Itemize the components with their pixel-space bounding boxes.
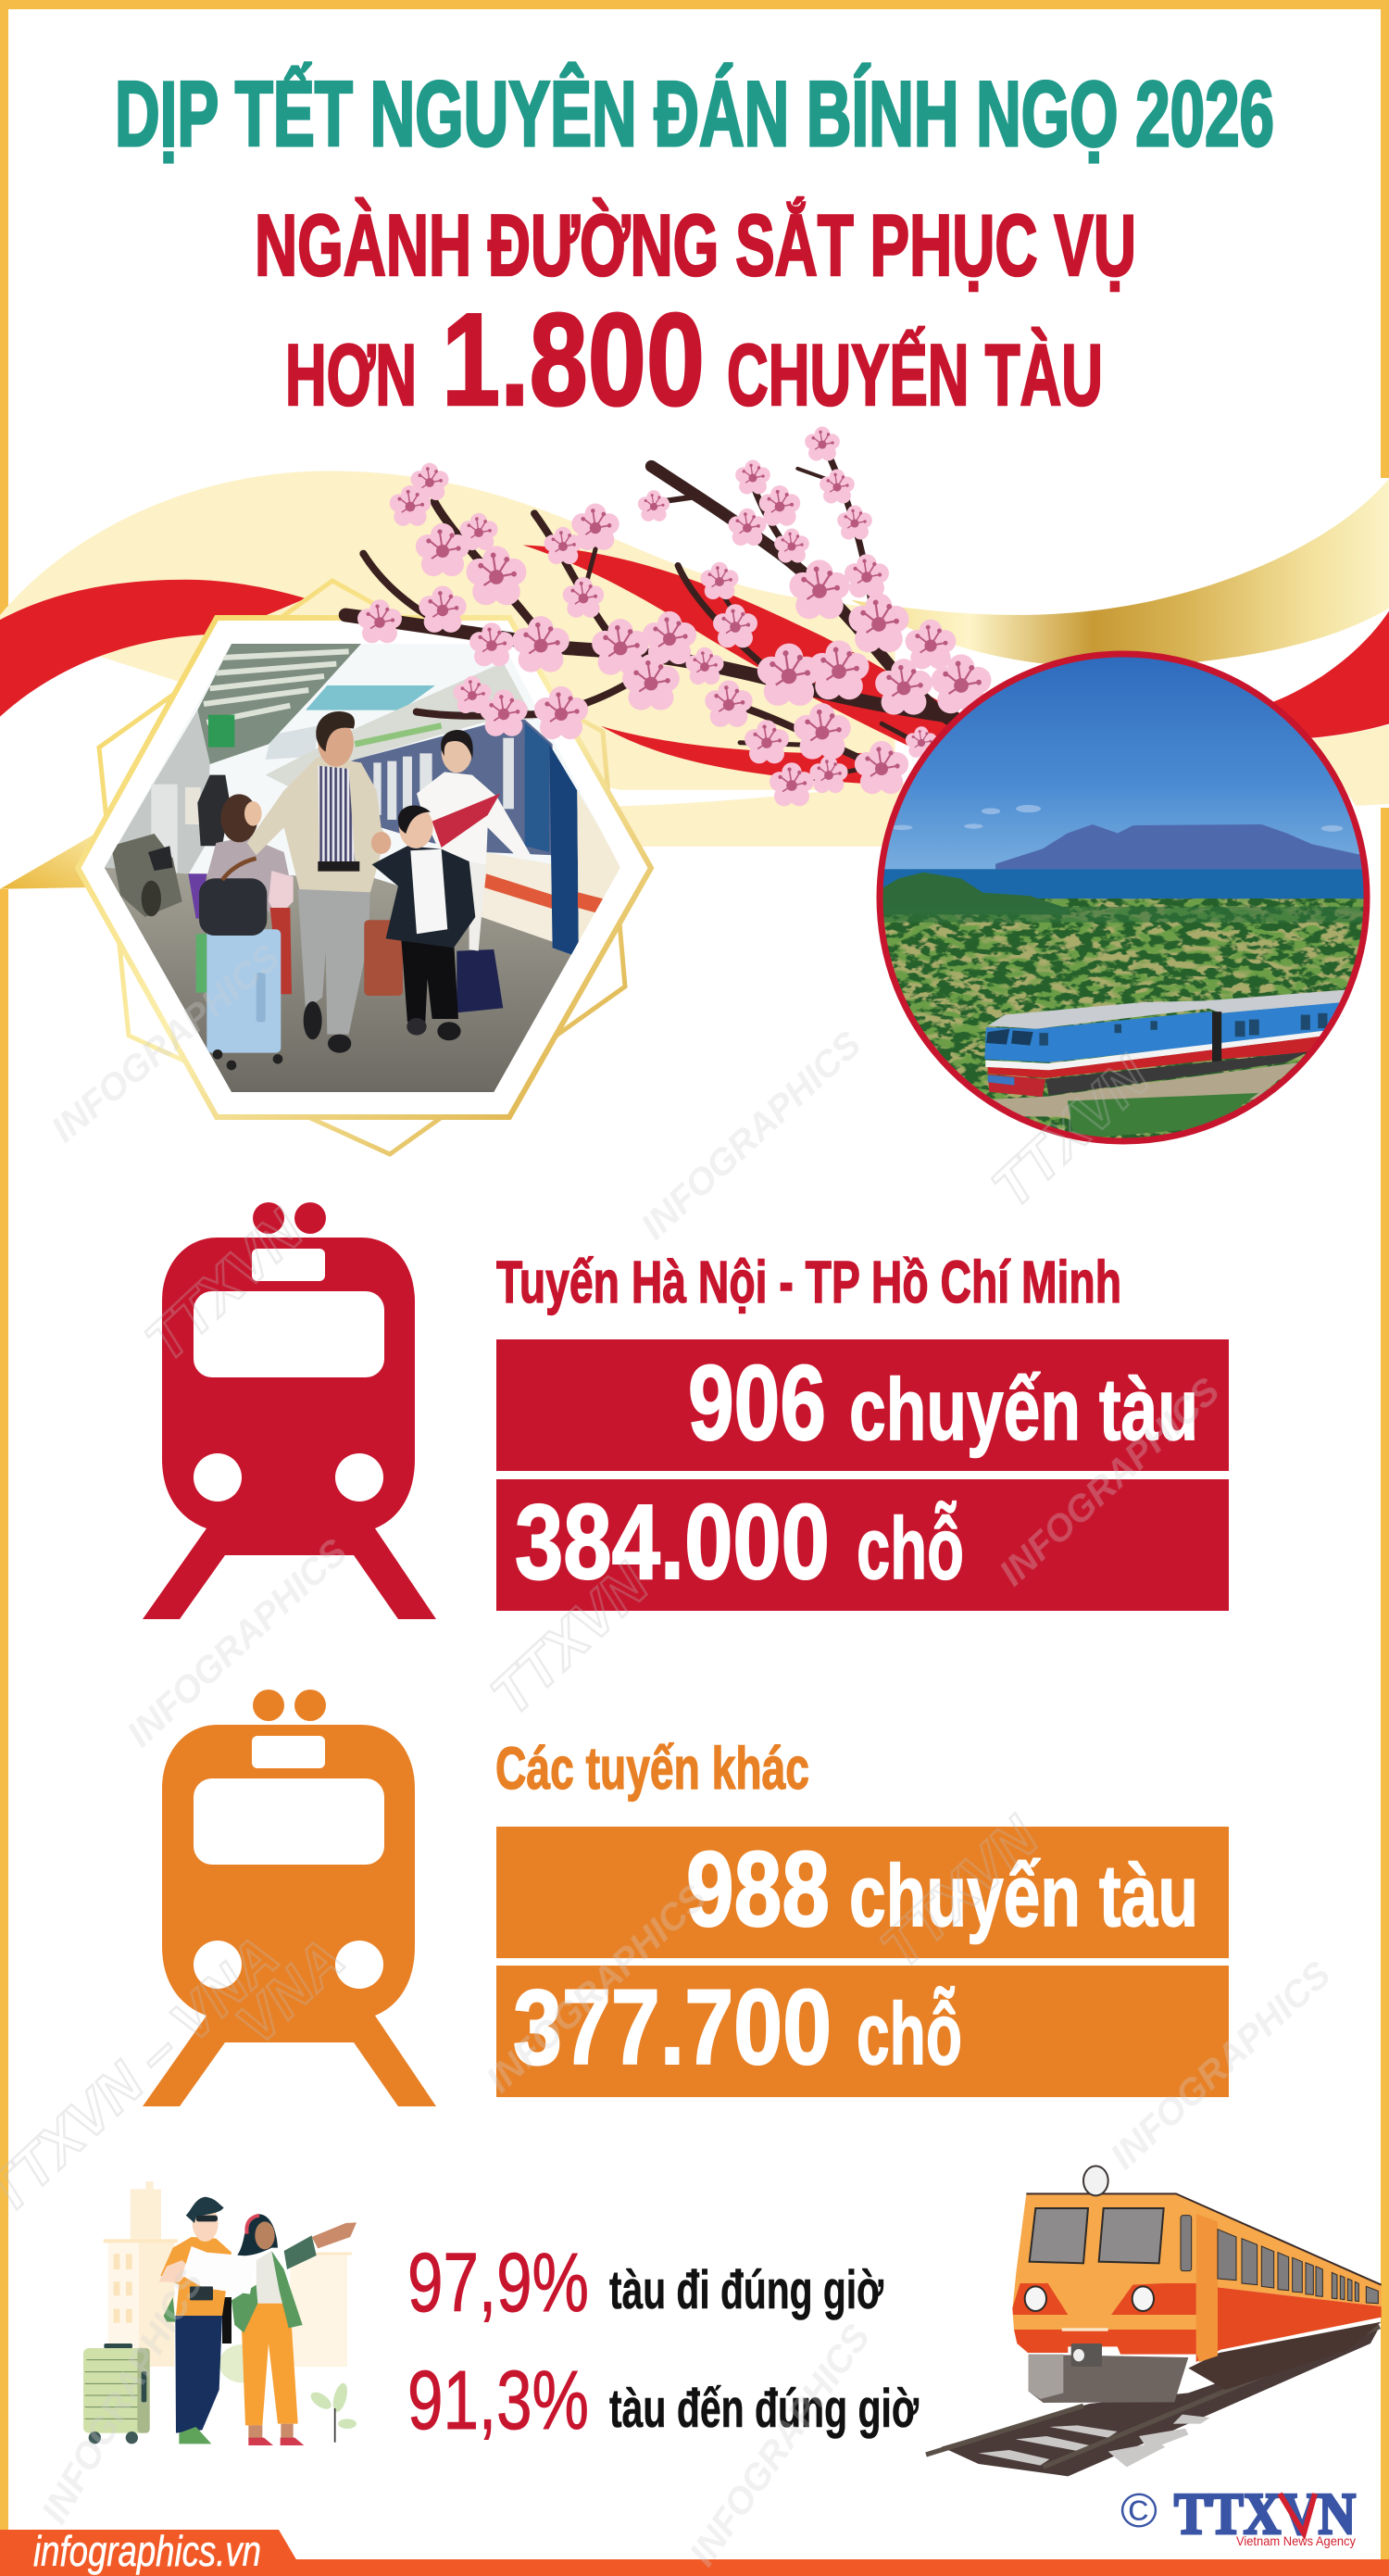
woman with duffle bag [196,794,294,1070]
icon: red train [143,1202,436,1619]
shopping bag [457,949,503,1012]
stat bar: 384.000 seats [496,1479,1229,1611]
footer bar with website [0,2527,1389,2576]
girl [417,730,531,951]
watermarks: INFOGRAPHICS [633,1024,870,1248]
stat bar: 384.000 seats: 384.000 [515,1483,830,1602]
stat: on-time departures [407,2237,884,2330]
photo: family at the station [104,644,620,1092]
stat bar: 988 trains: chuyến tàu [849,1847,1198,1945]
stat bar: 377.700 seats: chỗ [857,1985,962,2083]
watermarks: INFOGRAPHICS [119,1531,356,1755]
watermarks: TTXVN [479,1552,661,1728]
brown suitcase [364,920,403,996]
stat bar: 988 trains: 988 [686,1830,830,1949]
stat bar: 384.000 seats: chỗ [857,1500,964,1598]
illustration: travellers [83,2181,357,2445]
decorative ribbons [0,471,1389,889]
logo: TTXVN: © [1120,2484,1158,2538]
illustration: orange train on tracks [926,2166,1382,2476]
stat bar: 906 trains: 906 [688,1344,826,1463]
white hexagon frame [78,618,651,1117]
boy [371,806,475,1040]
watermarks: INFOGRAPHICS [34,2264,211,2531]
footer bar with website: infographics.vn [33,2527,261,2575]
watermarks: TTXVN [869,1804,1051,1980]
stat: on-time departures: tàu đi đúng giờ [609,2260,884,2320]
stat bar: 906 trains: chuyến tàu [849,1361,1198,1459]
cherry blossom branch [345,427,992,806]
section: other routes [143,1690,1229,2106]
logo: TTXVN: Vietnam News Agency [1236,2533,1356,2548]
logo: TTXVN: TTXVN [1174,2482,1356,2546]
man [247,711,386,1053]
stat bar: 377.700 seats: 377.700 [513,1968,832,2087]
watermarks: VNA [224,1927,357,2056]
stat: on-time arrivals: 91,3% [407,2355,589,2447]
watermarks: INFOGRAPHICS [682,2317,878,2573]
title: headline: CHUYẾN TÀU [727,326,1103,423]
watermarks: TTXVN [980,1044,1162,1220]
stat: on-time arrivals [407,2355,920,2447]
title: headline: 1.800 [442,286,705,434]
stat: on-time arrivals: tàu đến đúng giờ [609,2379,920,2439]
background travellers [111,775,230,919]
stat: on-time departures: 97,9% [407,2237,589,2330]
watermarks: TTXVN [133,1198,316,1374]
gold hexagon outline [99,581,625,1154]
route heading: Tuyến Hà Nội - TP Hồ Chí Minh [496,1249,1121,1315]
route heading: Các tuyến khác [495,1735,809,1802]
watermarks [0,936,1339,2573]
watermarks: INFOGRAPHICS [44,936,288,1150]
title: headline: HƠN [285,326,417,423]
watermarks: INFOGRAPHICS [992,1370,1228,1594]
stat bar: 377.700 seats [496,1966,1229,2097]
title: headline [255,195,1136,434]
watermarks: INFOGRAPHICS [479,1877,715,2101]
stat bar: 988 trains [496,1827,1229,1958]
icon: orange train [143,1690,436,2106]
logo: TTXVN [1120,2482,1356,2548]
photo: blue train along the coast [880,648,1370,1141]
section: Hanoi - HCMC route [143,1202,1229,1619]
locomotive and carriage [984,989,1346,1097]
stat bar: 906 trains [496,1339,1229,1471]
watermarks: INFOGRAPHICS [1103,1954,1339,2178]
